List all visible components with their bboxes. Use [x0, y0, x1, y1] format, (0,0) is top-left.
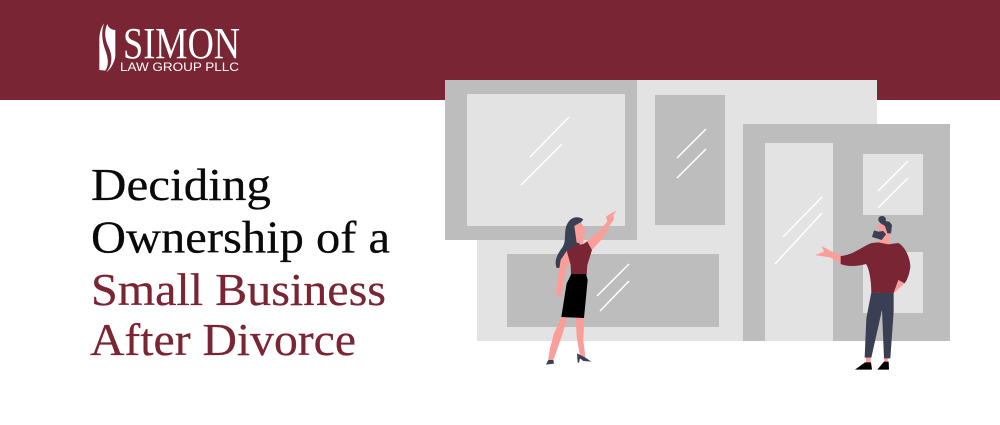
woman figure: [546, 211, 617, 365]
right wing: [743, 124, 950, 341]
icon: logo mark: [99, 23, 115, 73]
upper left window: [467, 94, 625, 226]
right lower window: [863, 252, 923, 313]
hair: [878, 216, 892, 233]
upper left frame: [445, 80, 637, 240]
building wall: [477, 80, 877, 341]
lower arm: [556, 250, 573, 297]
pointing hand: [815, 246, 842, 263]
hair: [556, 217, 583, 268]
sweater: [841, 242, 910, 294]
right upper window: [863, 154, 923, 215]
title line 4: After Divorce: [90, 314, 356, 365]
raised arm: [584, 211, 617, 250]
man figure: [815, 216, 910, 370]
blouse: [567, 242, 592, 275]
beard: [872, 230, 886, 240]
trousers: [865, 292, 894, 358]
title line 3: Small Business: [91, 264, 386, 315]
glass reflections: [521, 117, 908, 311]
logo tagline: LAW GROUP PLLC: [120, 60, 239, 74]
logo: [99, 19, 240, 74]
face: [574, 223, 586, 244]
title line 2: Ownership of a: [91, 212, 390, 262]
neck and head: [877, 222, 889, 245]
upper middle window: [655, 95, 725, 225]
ankles: [866, 358, 888, 363]
header band: [0, 0, 1000, 100]
storefront illustration: [445, 80, 950, 341]
shoes: [546, 353, 591, 365]
shoes: [855, 362, 889, 370]
lower display window: [507, 254, 719, 327]
hand on hip: [892, 280, 905, 294]
logo name: SIMON: [123, 19, 240, 68]
title line 1: Deciding: [91, 159, 271, 210]
door: [765, 143, 833, 341]
legs: [548, 317, 585, 361]
skirt: [561, 274, 588, 318]
title: [90, 159, 390, 365]
